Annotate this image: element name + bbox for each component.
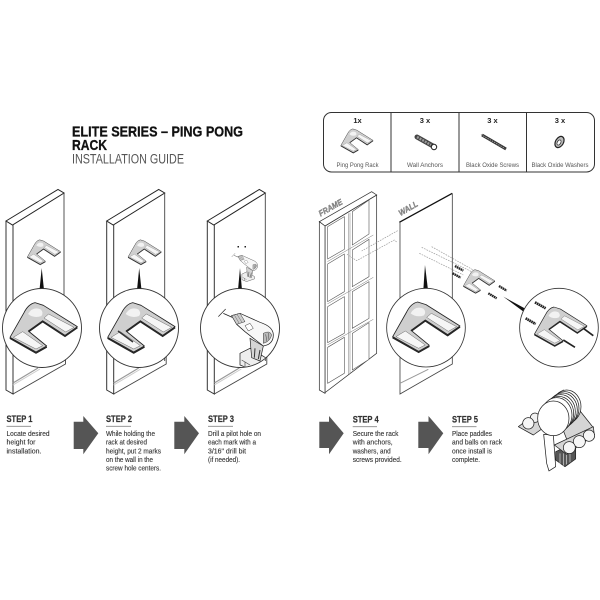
title <box>72 124 243 166</box>
part: black oxide washers: 3 x <box>555 116 566 125</box>
step 5 text: complete. <box>452 457 480 464</box>
step 3 illustration <box>200 190 280 394</box>
step 3 text: STEP 3 <box>208 414 234 425</box>
detail circle: rack on wall <box>387 288 465 367</box>
step 3 text: (if needed). <box>208 457 240 464</box>
step 2 illustration <box>100 190 178 394</box>
title: ELITE SERIES – PING PONG <box>72 124 243 140</box>
anchors and screws <box>453 266 507 298</box>
step 4 text: with anchors, <box>352 440 393 447</box>
arrow 1 <box>74 416 98 454</box>
part: wall anchors: 3 x <box>420 116 431 125</box>
arrow 3 <box>319 416 344 454</box>
step 3 text: each mark with a <box>208 440 256 447</box>
step 4 text <box>352 414 402 464</box>
step 2 text: height, put 2 marks <box>106 448 161 455</box>
step 4 text: STEP 4 <box>353 414 379 425</box>
step 3 text: 3/16" drill bit <box>208 448 246 455</box>
step 2 text: rack at desired <box>106 440 147 447</box>
step 4 text: screws provided. <box>353 457 402 464</box>
step 2 text: While holding the <box>106 431 155 438</box>
dashed alignment lines <box>347 231 473 275</box>
part: black oxide screws: 3 x <box>487 116 499 125</box>
step 2 text: screw hole centers. <box>106 466 161 473</box>
panel: parts list <box>324 112 594 172</box>
frame and wall illustration <box>317 192 598 394</box>
step 1 text: installation. <box>6 448 42 455</box>
arrow 4 <box>418 416 443 454</box>
label: frame: FRAME <box>317 197 345 218</box>
step 5 text <box>452 414 502 464</box>
detail circle: hardware <box>520 288 598 367</box>
part: black oxide washers: Black Oxide Washers <box>532 162 588 169</box>
part: black oxide screws <box>466 116 519 169</box>
part: ping pong rack: 1x <box>353 116 362 125</box>
drill marks <box>238 246 246 248</box>
step 2 text: on the wall in the <box>106 457 153 464</box>
step 5 text: STEP 5 <box>452 414 479 425</box>
step 2 text <box>106 414 161 473</box>
step 5 text: and balls on rack <box>452 440 502 447</box>
title: INSTALLATION GUIDE <box>72 151 184 166</box>
wall <box>399 193 452 394</box>
frame <box>319 192 377 393</box>
part: wall anchors: Wall Anchors <box>407 162 443 169</box>
step 5 text: Place paddles <box>452 431 492 438</box>
step 1 text: height for <box>6 440 36 447</box>
step 1 text: STEP 1 <box>6 414 33 425</box>
step 3 text <box>208 414 261 464</box>
step 4 text: washers, and <box>352 448 391 455</box>
part: black oxide screws: Black Oxide Screws <box>466 162 519 169</box>
step 3 text: Drill a pilot hole on <box>208 431 261 438</box>
label: wall: WALL <box>397 199 420 218</box>
step 2 text: STEP 2 <box>106 414 132 425</box>
title: RACK <box>72 138 107 154</box>
step 1 text <box>6 414 50 455</box>
step 1 illustration <box>2 190 82 394</box>
step 5 text: once install is <box>452 448 492 455</box>
step 4 text: Secure the rack <box>353 431 399 438</box>
icon: rack loaded with paddles and balls <box>518 390 595 471</box>
part: ping pong rack <box>336 116 379 169</box>
step 1 text: Locate desired <box>6 431 50 438</box>
part: black oxide washers <box>532 116 588 169</box>
arrow 2 <box>174 416 199 454</box>
part: wall anchors <box>407 116 443 169</box>
part: ping pong rack: Ping Pong Rack <box>336 162 379 169</box>
